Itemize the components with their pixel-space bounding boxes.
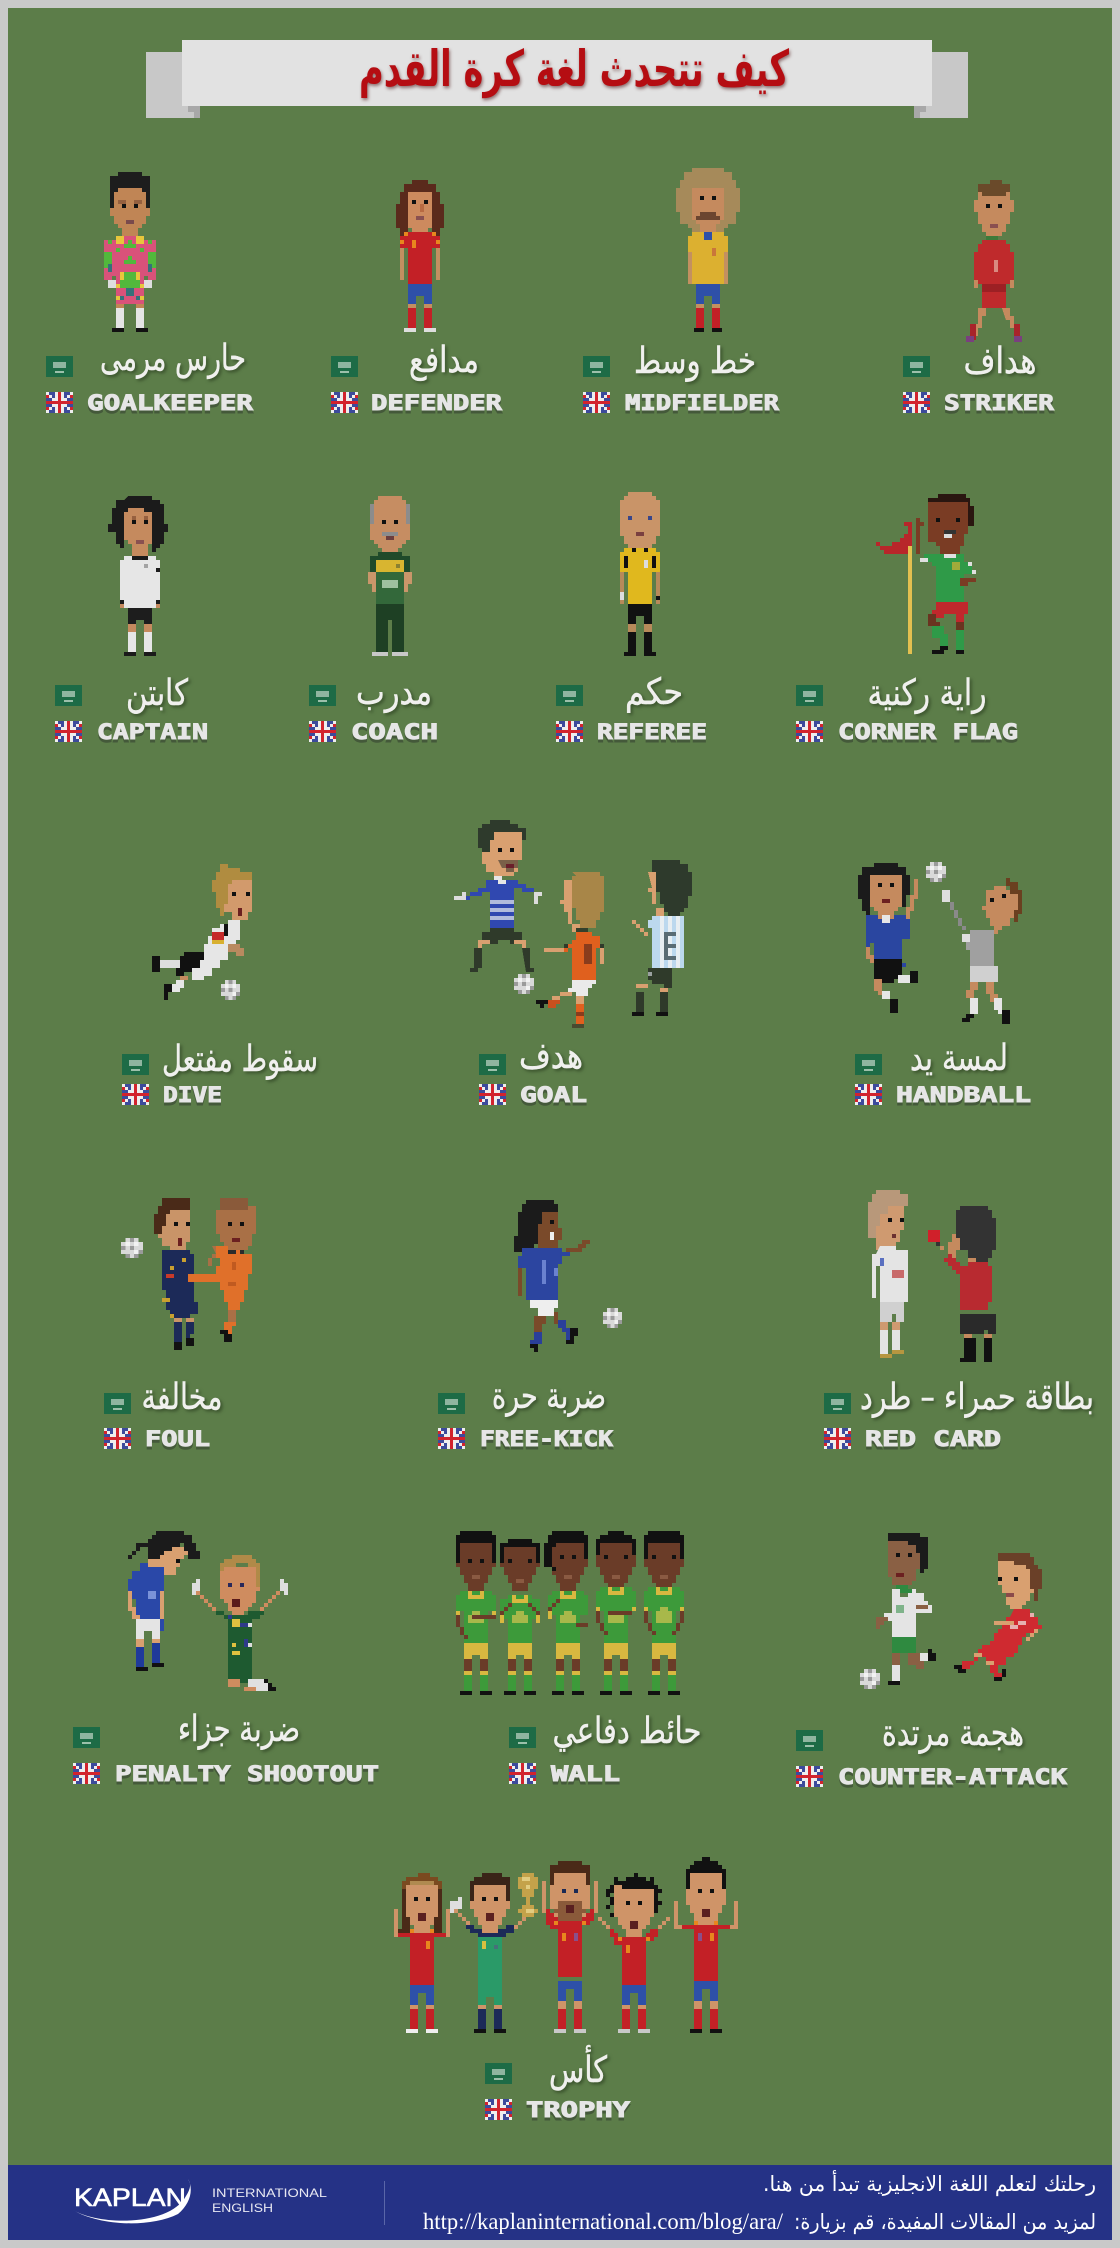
english label: CAPTAIN <box>97 720 208 744</box>
flag: arabic <box>331 356 358 377</box>
item: handball <box>855 862 1031 1107</box>
english label: COACH <box>351 720 438 744</box>
banner ribbon <box>182 40 932 106</box>
icon: corner flag pennant <box>876 522 912 554</box>
pixel figure: navy player <box>154 1198 198 1350</box>
english label: GOALKEEPER <box>87 391 253 415</box>
english label: DEFENDER <box>371 391 502 415</box>
pixel figure: wall player 4 <box>596 1531 636 1695</box>
pixel figure: orange player <box>536 872 604 1028</box>
english label: STRIKER <box>944 391 1054 415</box>
icon: trophy highlight <box>522 1877 534 1913</box>
flag: english <box>438 1428 465 1449</box>
pixel figure: diving player <box>152 864 252 1000</box>
pixel figure: shilton <box>942 878 1022 1024</box>
title banner <box>146 40 968 118</box>
english label: REFEREE <box>597 720 707 744</box>
flag: english <box>855 1084 882 1105</box>
icon: ball <box>221 980 240 1000</box>
item: free-kick <box>438 1200 622 1451</box>
flag: english <box>309 721 336 742</box>
pixel figure: trophy team goalkeeper <box>450 1873 526 2033</box>
pixel figure: referee <box>620 492 660 656</box>
flag: arabic <box>485 2063 512 2084</box>
arabic label: ضربة حرة <box>492 1376 606 1417</box>
footer background <box>8 2165 1112 2240</box>
logo tagline: INTERNATIONAL <box>212 2186 327 2200</box>
title: كيف تتحدث لغة كرة القدم <box>359 40 790 99</box>
arabic label: راية ركنية <box>868 673 986 714</box>
item: referee <box>556 492 707 744</box>
flag: english <box>55 721 82 742</box>
pixel figure: defender <box>396 180 444 332</box>
flag: english <box>479 1084 506 1105</box>
flag: arabic <box>903 356 930 377</box>
logo swoosh <box>73 2179 191 2223</box>
pixel figure: coach <box>368 496 412 656</box>
item: corner flag <box>796 494 1018 744</box>
arabic label: مدرب <box>356 672 432 713</box>
icon: ball <box>926 862 946 882</box>
item: defender <box>331 180 502 415</box>
arabic label: ضربة جزاء <box>178 1709 300 1750</box>
pixel figure: wall player 3 <box>544 1531 588 1695</box>
flag: english <box>583 392 610 413</box>
flag: arabic <box>796 685 823 706</box>
banner tail left <box>146 52 200 118</box>
item: captain <box>55 496 208 744</box>
pixel figure: goalkeeper <box>104 172 156 332</box>
english label: TROPHY <box>526 2098 630 2122</box>
arabic label: كابتن <box>126 673 189 714</box>
arabic label: هداف <box>964 341 1036 382</box>
pixel figure: corner flag player <box>916 494 976 654</box>
flag: arabic <box>796 1730 823 1751</box>
item: coach <box>309 496 438 744</box>
pixel figure: wall player 5 <box>644 1531 684 1695</box>
pixel figure: captain <box>108 496 168 656</box>
logo tagline second line: ENGLISH <box>212 2201 273 2215</box>
english label: FOUL <box>145 1427 210 1451</box>
pixel figure: maradona <box>858 863 918 1013</box>
item: counter-attack <box>796 1533 1067 1789</box>
icon: world cup trophy <box>518 1873 538 1917</box>
item: wall <box>456 1531 702 1786</box>
pixel figure: red sliding player <box>954 1553 1042 1681</box>
footer bar <box>8 2165 1112 2240</box>
flag: english <box>509 1763 536 1784</box>
flag: arabic <box>309 685 336 706</box>
pixel figure: white player kicking <box>876 1533 936 1685</box>
flag: arabic <box>438 1393 465 1414</box>
footer line 2 <box>423 2209 1096 2235</box>
pixel figure: player in white <box>868 1190 908 1358</box>
pixel figure: wall player 1 <box>456 1531 496 1695</box>
arabic label: هجمة مرتدة <box>882 1713 1024 1754</box>
flag: arabic <box>855 1054 882 1075</box>
item: midfielder <box>583 168 779 415</box>
english label: GOAL <box>520 1083 587 1107</box>
flag: english <box>331 392 358 413</box>
english label: COUNTER-ATTACK <box>838 1765 1067 1789</box>
item: penalty shootout <box>73 1531 379 1786</box>
flag: english <box>73 1763 100 1784</box>
english label: WALL <box>551 1762 620 1786</box>
flag: arabic <box>122 1054 149 1075</box>
english label: FREE-KICK <box>480 1427 613 1451</box>
footer arabic prompt: لمزيد من المقالات المفيدة، قم بزيارة: <box>794 2210 1096 2235</box>
item: foul <box>104 1198 256 1451</box>
pixel figure: argentina player from behind <box>632 860 692 1016</box>
pixel figure: midfielder <box>676 168 740 332</box>
footer divider <box>384 2181 385 2225</box>
pixel figure: trophy team player 1 <box>394 1873 450 2033</box>
arabic label: هدف <box>519 1036 583 1077</box>
logo wordmark: KAPLAN <box>74 2184 186 2212</box>
english label: HANDBALL <box>896 1083 1031 1107</box>
icon: ball <box>121 1238 143 1258</box>
arabic label: لمسة يد <box>910 1038 1008 1079</box>
english label: CORNER FLAG <box>838 720 1018 744</box>
pixel figure: orange player kicking <box>188 1198 256 1342</box>
english label: PENALTY SHOOTOUT <box>115 1762 379 1786</box>
flag: english <box>796 721 823 742</box>
flag: english <box>556 721 583 742</box>
flag: arabic <box>583 356 610 377</box>
arabic label: كأس <box>549 2045 608 2091</box>
footer url: http://kaplaninternational.com/blog/ara/ <box>423 2209 784 2234</box>
flag: arabic <box>46 356 73 377</box>
arabic label: حارس مرمى <box>100 338 246 379</box>
flag: english <box>46 392 73 413</box>
item: striker <box>903 180 1054 415</box>
flag: arabic <box>73 1727 100 1748</box>
flag: arabic <box>479 1054 506 1075</box>
item: dive <box>122 864 318 1107</box>
banner tail right <box>914 52 968 118</box>
pixel figure: blue striped player <box>454 820 542 972</box>
flag: arabic <box>824 1393 851 1414</box>
item: trophy <box>394 1857 738 2122</box>
flag: english <box>122 1084 149 1105</box>
footer line 1: رحلتك لتعلم اللغة الانجليزية تبدأ من هنا. <box>763 2170 1096 2197</box>
item: goalkeeper <box>46 172 253 415</box>
flag: english <box>824 1428 851 1449</box>
flag: english <box>796 1766 823 1787</box>
pixel figure: wall player 2 <box>500 1539 540 1695</box>
banner fold shades <box>188 106 926 118</box>
arabic label: مخالفة <box>142 1377 222 1418</box>
pixel figure: trophy team player 4 <box>598 1873 670 2033</box>
arabic label: خط وسط <box>634 341 756 382</box>
flag: english <box>104 1428 131 1449</box>
flag: arabic <box>509 1727 536 1748</box>
arabic label: مدافع <box>409 340 479 381</box>
item: red card <box>824 1190 1094 1451</box>
flag: english <box>903 392 930 413</box>
flag: arabic <box>104 1393 131 1414</box>
icon: ball <box>603 1308 622 1328</box>
pixel figure: referee with red card <box>928 1206 996 1362</box>
item: goal <box>454 820 692 1107</box>
arabic label: سقوط مفتعل <box>162 1039 318 1080</box>
english label: MIDFIELDER <box>625 391 779 415</box>
english label: DIVE <box>163 1083 222 1107</box>
icon: ball <box>514 974 534 994</box>
flag: arabic <box>55 685 82 706</box>
arabic label: حائط دفاعي <box>552 1711 702 1752</box>
icon: corner flag pole <box>908 546 912 654</box>
pixel figure: striker <box>966 180 1022 342</box>
flag: english <box>485 2099 512 2120</box>
pixel figure: trophy team player 3 <box>542 1861 598 2033</box>
pixel figure: celebrating goalkeeper <box>192 1555 288 1691</box>
pixel figure: free-kick taker <box>514 1200 590 1352</box>
icon: ball <box>860 1669 880 1689</box>
kaplan logo <box>73 2179 327 2223</box>
pixel figure: bowed blue player <box>128 1531 200 1671</box>
english label: RED CARD <box>865 1427 1001 1451</box>
arabic label: حكم <box>625 672 683 713</box>
pixel figure: trophy team player 5 <box>674 1857 738 2033</box>
flag: arabic <box>556 685 583 706</box>
